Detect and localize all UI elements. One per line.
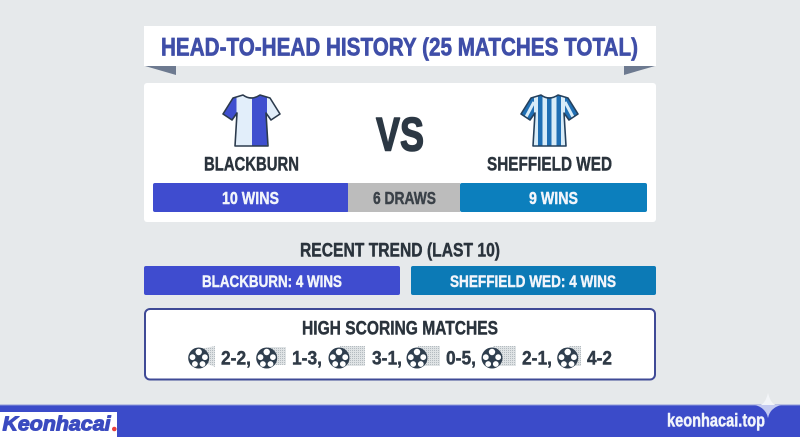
recent trend: Sheffield Wed <box>411 266 656 295</box>
recent trend: Blackburn: BLACKBURN: 4 WINS <box>202 272 342 291</box>
heading: high scoring matches: HIGH SCORING MATCHES <box>302 318 498 340</box>
footer logo: Keonhacai <box>2 412 112 436</box>
title banner <box>144 26 656 75</box>
panel: high scoring matches <box>145 309 655 380</box>
score: 0-5: 0-5, <box>446 348 476 370</box>
results bar <box>153 183 647 212</box>
vs label: VS <box>376 108 424 160</box>
score: 1-3: 1-3, <box>292 348 322 370</box>
results bar: 9 WINS <box>529 188 578 208</box>
recent trend: Sheffield Wed: SHEFFIELD WED: 4 WINS <box>450 272 616 291</box>
score: 0-5 <box>406 346 476 370</box>
footer url: keonhacai.top <box>667 410 765 430</box>
results bar: 10 WINS <box>222 188 279 208</box>
score: 2-2 <box>188 346 251 370</box>
team name: Blackburn: BLACKBURN <box>204 154 299 176</box>
score: 3-1 <box>328 346 402 370</box>
score: 2-1 <box>482 346 552 370</box>
icon: Blackburn shirt <box>222 94 281 147</box>
decorative star <box>755 393 781 418</box>
score: 2-2: 2-2, <box>221 348 251 370</box>
score: 2-1: 2-1, <box>522 348 552 370</box>
title banner: HEAD-TO-HEAD HISTORY (25 MATCHES TOTAL) <box>161 34 638 62</box>
score: 4-2: 4-2 <box>587 348 612 370</box>
footer bar <box>0 393 800 437</box>
heading: recent trend: RECENT TREND (LAST 10) <box>300 240 500 262</box>
icon: Sheffield Wednesday shirt <box>520 94 579 147</box>
results bar: 6 DRAWS <box>373 188 436 208</box>
score: 4-2 <box>557 346 612 370</box>
panel: head-to-head card <box>144 83 656 222</box>
score: 1-3 <box>256 347 322 370</box>
recent trend: Blackburn <box>144 266 400 295</box>
team name: Sheffield Wed: SHEFFIELD WED <box>487 154 612 176</box>
score: 3-1: 3-1, <box>372 348 402 370</box>
